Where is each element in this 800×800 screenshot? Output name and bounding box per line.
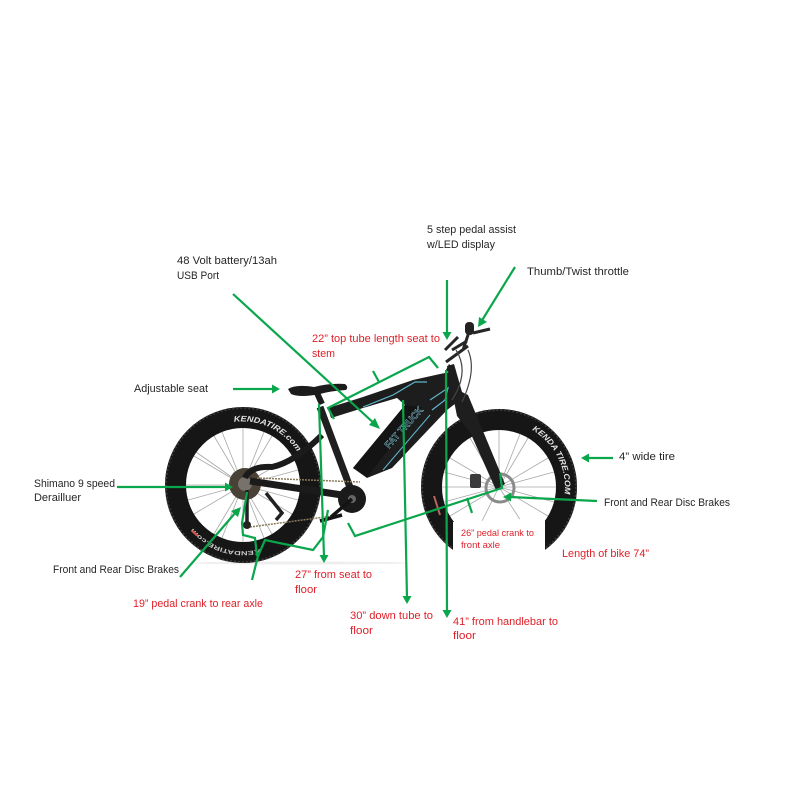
label: seat to floor: floor (295, 584, 317, 596)
arrow: seat to floor (319, 404, 328, 563)
rear wheel: KENDATIRE.com (234, 416, 300, 451)
frame (245, 364, 505, 495)
arrow: tire width (581, 454, 613, 462)
label: rear disc brakes: Front and Rear Disc Brakes (53, 564, 179, 576)
label: pedal assist: 5 step pedal assist (427, 224, 516, 236)
battery (353, 404, 430, 477)
label: pedal crank to front axle: front axle (461, 540, 500, 551)
arrow: throttle (478, 267, 515, 327)
front wheel (421, 409, 577, 550)
rear wheel (165, 407, 321, 563)
handlebar (445, 322, 490, 402)
arrow: battery (233, 294, 380, 429)
crankset and chain (243, 478, 366, 529)
arrow: down tube to floor (402, 400, 412, 604)
label: handlebar to floor: 41” from handlebar to (453, 616, 558, 628)
saddle (288, 384, 347, 404)
label: pedal crank to front axle: 26” pedal crank to (461, 528, 534, 539)
arrow: front disc brakes (503, 492, 597, 502)
bike illustration (165, 322, 577, 564)
label: tire width: 4” wide tire (619, 451, 675, 463)
label: handlebar to floor: floor (453, 630, 476, 642)
label: derailleur: Derailluer (34, 492, 81, 504)
label: battery: USB Port (177, 270, 219, 282)
arrow: handlebar to floor (442, 370, 452, 618)
arrow: derailleur (117, 482, 233, 492)
green annotation lines (117, 267, 613, 618)
label: throttle: Thumb/Twist throttle (527, 266, 629, 278)
arrow: adjustable seat (233, 384, 280, 394)
label: pedal crank to rear axle: 19” pedal crank to rear axle (133, 598, 263, 610)
label: seat to floor: 27” from seat to (295, 569, 372, 581)
white label patch over front wheel (453, 518, 545, 568)
label: bike length: Length of bike 74” (562, 548, 649, 560)
bracket: pedal crank to rear axle (242, 492, 328, 580)
ground shadow (190, 562, 410, 564)
label: down tube to floor: 30” down tube to (350, 610, 433, 622)
label: adjustable seat: Adjustable seat (134, 383, 208, 395)
label: top tube length: 22” top tube length seat to (312, 333, 440, 345)
arrow: rear disc brakes (180, 507, 241, 577)
label: top tube length: stem (312, 348, 335, 360)
label: derailleur: Shimano 9 speed (34, 478, 115, 490)
label: pedal assist: w/LED display (426, 239, 495, 251)
label: battery: 48 Volt battery/13ah (177, 255, 277, 267)
bracket: top tube length (328, 357, 438, 419)
bracket: pedal crank to front axle (348, 473, 502, 536)
label: down tube to floor: floor (350, 625, 373, 637)
battery: FAT TRUCK (383, 404, 427, 451)
front wheel: KENDA TIRE.COM (532, 426, 570, 495)
rear wheel: KENDATIRE.com (191, 528, 260, 556)
arrow: pedal assist display (442, 280, 452, 340)
label: front disc brakes: Front and Rear Disc Brakes (604, 497, 730, 509)
